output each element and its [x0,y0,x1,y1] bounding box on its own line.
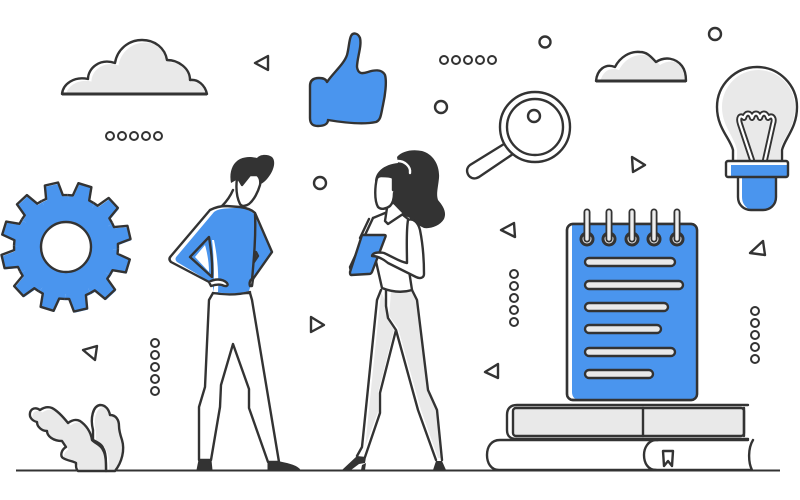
decorative dots: row top [440,56,496,64]
lower book [487,440,753,470]
bookmark [663,451,673,466]
note lines [585,258,683,378]
person: woman [342,150,446,470]
man hair [230,155,274,186]
icon: plant [30,405,126,474]
upper book [507,405,748,439]
spiral rings [580,212,684,246]
ground line [16,470,780,472]
woman trousers [357,290,442,460]
icon: thumbs up [310,34,386,126]
woman face [375,176,396,209]
woman hair [375,150,445,228]
person: man [170,155,300,470]
decorative dots: column left [151,339,159,395]
man shirt highlights [212,240,218,292]
woman torso [373,212,412,292]
man neck [222,190,233,206]
notebook [567,212,697,400]
woman strap arm [350,218,373,272]
man outline [170,206,272,294]
man face [236,175,260,206]
bulb filament [739,114,774,160]
man shirt fill [170,206,272,294]
woman shoes [342,456,446,470]
icon: small cloud [596,52,690,84]
icon: gear [0,181,133,314]
decorative dots: row left [106,132,162,140]
decorative circles [314,28,721,189]
decorative dots: column middle [510,270,518,326]
woman arm [372,219,424,278]
man shoes [197,460,300,470]
man trousers [199,293,279,462]
decorative dots: column right [751,307,759,363]
man hands [209,280,228,286]
icon: large cloud [62,40,210,96]
decorative triangles [83,56,765,378]
icon: light bulb [717,67,797,210]
books [487,405,753,470]
woman neck [385,208,403,224]
icon: magnifying glass [467,92,570,178]
tablet [350,235,386,275]
